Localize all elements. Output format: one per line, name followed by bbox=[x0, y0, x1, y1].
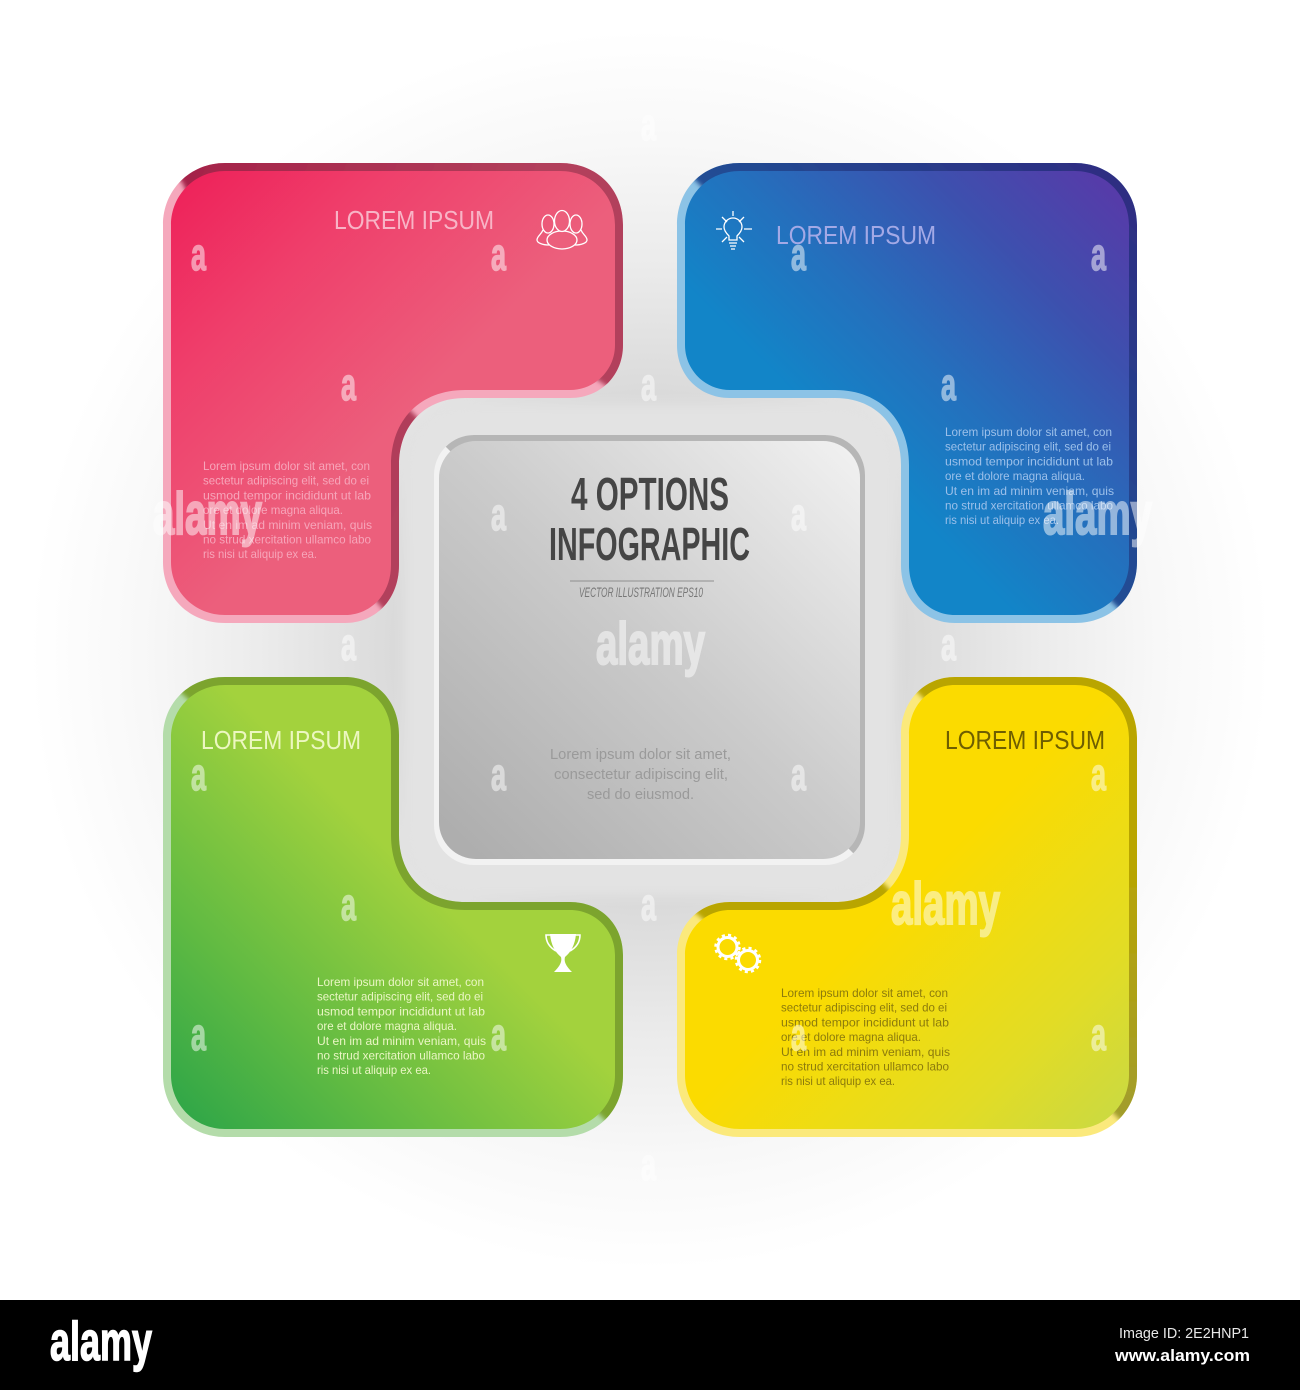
body text: yellow: Ut en im ad minim veniam, quis bbox=[781, 1045, 950, 1059]
body text: green: Ut en im ad minim veniam, quis bbox=[317, 1034, 486, 1048]
body text: yellow: sectetur adipiscing elit, sed do ei bbox=[781, 1001, 947, 1015]
watermarks: a bbox=[1091, 749, 1107, 800]
watermarks: alamy bbox=[891, 871, 1000, 937]
body text: pink: usmod tempor incididunt ut lab bbox=[203, 488, 371, 502]
watermarks: a bbox=[491, 489, 507, 540]
body text: yellow bbox=[781, 986, 950, 1088]
watermarks: a bbox=[791, 229, 807, 280]
watermarks: alamy bbox=[1043, 481, 1152, 547]
watermarks: a bbox=[941, 619, 957, 670]
body text: blue: sectetur adipiscing elit, sed do ei bbox=[945, 440, 1111, 454]
body text: pink: sectetur adipiscing elit, sed do ei bbox=[203, 474, 369, 488]
footer logo: alamy bbox=[50, 1310, 152, 1372]
body text: green: ore et dolore magna aliqua. bbox=[317, 1019, 457, 1033]
body text: pink: Ut en im ad minim veniam, quis bbox=[203, 518, 372, 532]
body text: yellow: no strud xercitation ullamco labo bbox=[781, 1060, 949, 1074]
body text: blue: ris nisi ut aliquip ex ea. bbox=[945, 513, 1059, 527]
watermarks: a bbox=[341, 359, 357, 410]
body text: green: usmod tempor incididunt ut lab bbox=[317, 1004, 485, 1018]
body text: pink: no strud xercitation ullamco labo bbox=[203, 532, 371, 546]
centre description: sed do eiusmod. bbox=[587, 786, 694, 803]
heading: blue: LOREM IPSUM bbox=[776, 220, 936, 250]
watermarks: a bbox=[191, 229, 207, 280]
body text: blue: usmod tempor incididunt ut lab bbox=[945, 454, 1113, 468]
panel: centre tile bbox=[425, 426, 875, 875]
body text: yellow: ore et dolore magna aliqua. bbox=[781, 1030, 921, 1044]
watermarks: alamy bbox=[596, 611, 705, 677]
body text: pink: Lorem ipsum dolor sit amet, con bbox=[203, 459, 370, 473]
centre description: consectetur adipiscing elit, bbox=[554, 766, 728, 783]
icon: light bulb bbox=[716, 211, 752, 249]
watermarks: a bbox=[641, 359, 657, 410]
body text: blue: no strud xercitation ullamco labo bbox=[945, 498, 1113, 512]
watermarks bbox=[153, 99, 1152, 1190]
watermarks: a bbox=[641, 879, 657, 930]
footer url: www.alamy.com bbox=[1114, 1346, 1250, 1365]
icon: gears bbox=[716, 935, 760, 972]
watermarks: a bbox=[491, 749, 507, 800]
heading: pink: LOREM IPSUM bbox=[334, 205, 494, 235]
heading: green: LOREM IPSUM bbox=[201, 725, 361, 755]
body text: blue bbox=[945, 425, 1114, 527]
watermarks: a bbox=[791, 1009, 807, 1060]
body text: green: ris nisi ut aliquip ex ea. bbox=[317, 1063, 431, 1077]
icon: people bbox=[537, 210, 587, 249]
body text: pink bbox=[203, 459, 372, 561]
panel: pink option bbox=[163, 163, 623, 623]
body text: yellow: Lorem ipsum dolor sit amet, con bbox=[781, 986, 948, 1000]
watermarks: a bbox=[1091, 229, 1107, 280]
watermarks: a bbox=[341, 619, 357, 670]
body text: pink: ore et dolore magna aliqua. bbox=[203, 503, 343, 517]
watermarks: a bbox=[1091, 1009, 1107, 1060]
panel: blue option bbox=[676, 163, 1137, 623]
watermarks: a bbox=[491, 1009, 507, 1060]
title: 4 OPTIONS bbox=[571, 468, 729, 520]
panel: yellow option bbox=[676, 677, 1137, 1137]
heading: yellow: LOREM IPSUM bbox=[945, 725, 1105, 755]
panel: green option bbox=[163, 677, 623, 1137]
watermarks: a bbox=[941, 359, 957, 410]
body text: blue: ore et dolore magna aliqua. bbox=[945, 469, 1085, 483]
watermarks: a bbox=[191, 749, 207, 800]
watermarks: a bbox=[191, 1009, 207, 1060]
body text: green: no strud xercitation ullamco labo bbox=[317, 1048, 485, 1062]
centre description: Lorem ipsum dolor sit amet, bbox=[550, 746, 731, 763]
watermarks: a bbox=[341, 879, 357, 930]
title: INFOGRAPHIC bbox=[549, 518, 750, 570]
watermarks: a bbox=[791, 489, 807, 540]
footer bar bbox=[0, 1300, 1300, 1390]
body text: yellow: usmod tempor incididunt ut lab bbox=[781, 1015, 949, 1029]
body text: green: sectetur adipiscing elit, sed do ei bbox=[317, 990, 483, 1004]
subtitle: VECTOR ILLUSTRATION EPS10 bbox=[579, 584, 703, 600]
body text: pink: ris nisi ut aliquip ex ea. bbox=[203, 547, 317, 561]
title bbox=[549, 468, 750, 570]
watermarks: a bbox=[641, 99, 657, 150]
body text: blue: Ut en im ad minim veniam, quis bbox=[945, 484, 1114, 498]
body text: green bbox=[317, 975, 486, 1077]
watermarks: a bbox=[641, 1139, 657, 1190]
watermarks: a bbox=[491, 229, 507, 280]
icon: trophy bbox=[546, 934, 580, 972]
body text: green: Lorem ipsum dolor sit amet, con bbox=[317, 975, 484, 989]
watermarks: a bbox=[791, 749, 807, 800]
watermarks: alamy bbox=[153, 481, 262, 547]
footer image id: Image ID: 2E2HNP1 bbox=[1119, 1325, 1249, 1342]
body text: yellow: ris nisi ut aliquip ex ea. bbox=[781, 1074, 895, 1088]
body text: blue: Lorem ipsum dolor sit amet, con bbox=[945, 425, 1112, 439]
centre description bbox=[550, 746, 731, 803]
